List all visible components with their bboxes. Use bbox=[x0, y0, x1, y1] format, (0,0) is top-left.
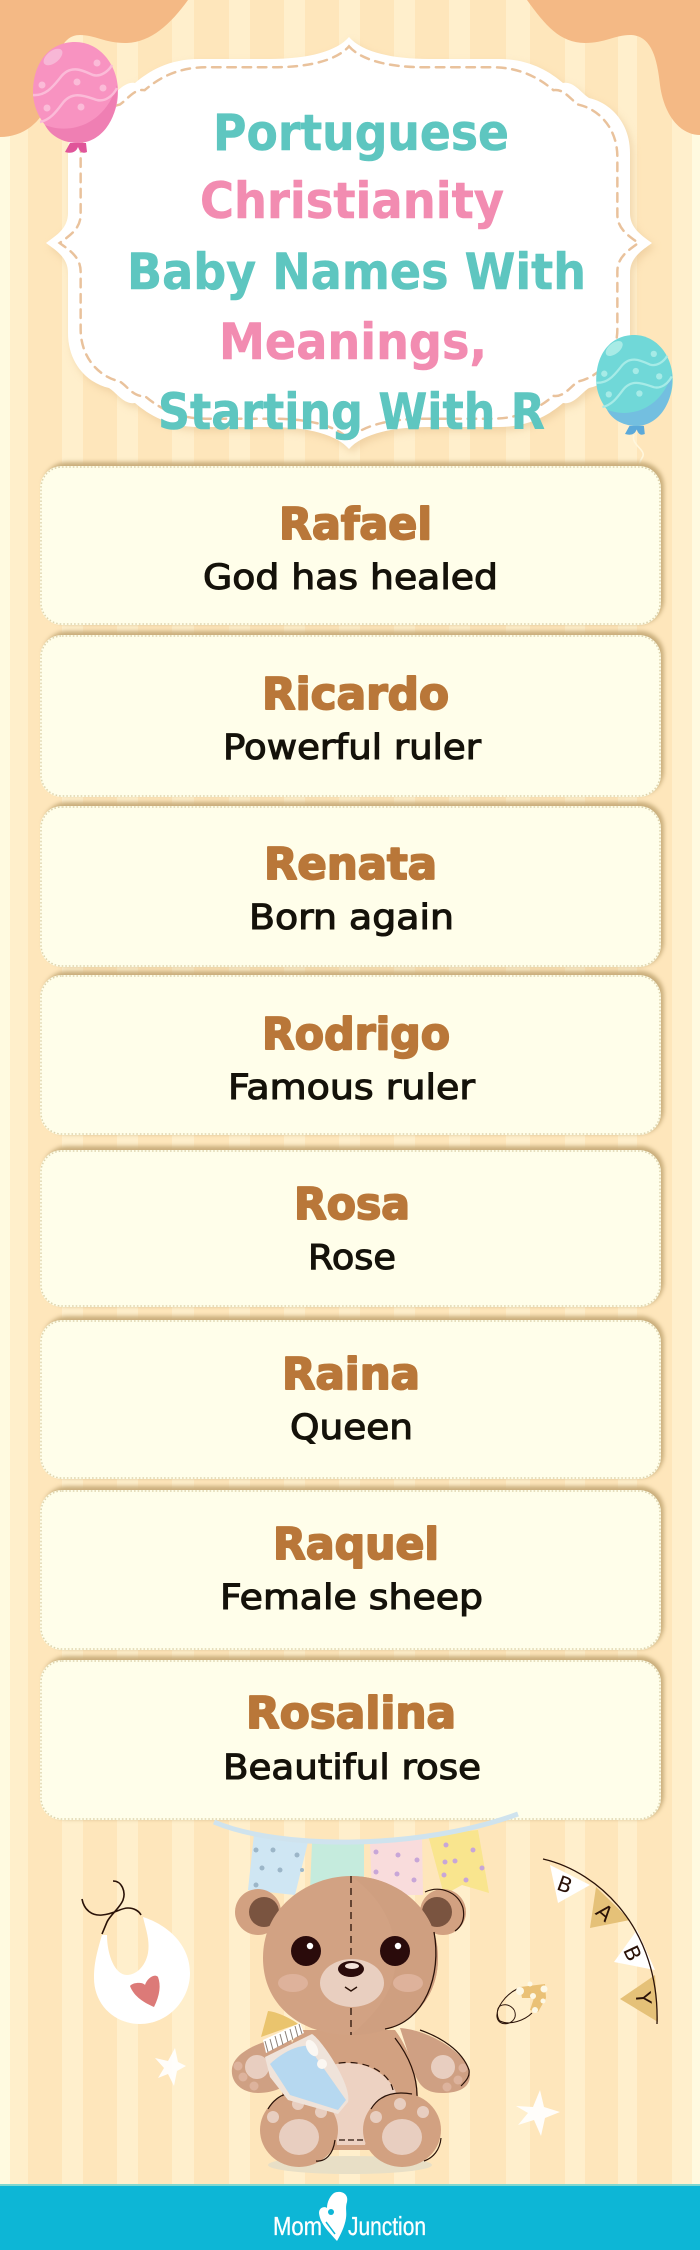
cheeks bbox=[278, 1974, 308, 1992]
left arm bbox=[232, 2035, 300, 2093]
right ear bbox=[420, 1889, 466, 1935]
body bbox=[282, 2030, 418, 2150]
meaning: Famous ruler: Famous ruler bbox=[228, 1068, 476, 1108]
flag B second: B bbox=[618, 1942, 646, 1965]
name: Rafael: Rafael bbox=[279, 499, 432, 550]
muzzle bbox=[320, 1959, 384, 2007]
name: Renata: Renata bbox=[264, 839, 437, 890]
left foot bbox=[260, 2092, 338, 2167]
icon: safety pin bbox=[497, 1982, 548, 2024]
icon: teddy bear bbox=[232, 1876, 470, 2174]
flag A bbox=[590, 1887, 630, 1928]
name: Rosa: Rosa bbox=[294, 1179, 410, 1230]
icon: star right bbox=[516, 2090, 560, 2136]
flag B second bbox=[614, 1930, 655, 1970]
BABY banner bbox=[543, 1859, 658, 2024]
footer logo bbox=[273, 2192, 426, 2241]
panel: Raquel bbox=[40, 1486, 664, 1650]
heart bbox=[130, 1976, 160, 2007]
name: Rosalina: Rosalina bbox=[246, 1688, 456, 1739]
name: Rodrigo: Rodrigo bbox=[262, 1009, 450, 1060]
milk bottle bbox=[261, 2011, 348, 2114]
panel: Renata bbox=[40, 802, 664, 967]
panel: Rosalina bbox=[40, 1656, 664, 1820]
logo icon bbox=[319, 2192, 347, 2241]
footer bar bbox=[0, 2184, 700, 2250]
bunting flags bbox=[214, 1814, 518, 1895]
icon: star left bbox=[155, 2048, 186, 2086]
footer logo: Junction bbox=[348, 2211, 426, 2241]
title bbox=[127, 104, 586, 441]
panel: Rosa bbox=[40, 1146, 664, 1307]
belly patch bbox=[327, 2062, 398, 2145]
right arm bbox=[400, 2028, 470, 2093]
panel: Raina bbox=[40, 1316, 664, 1479]
meaning: Female sheep: Female sheep bbox=[220, 1578, 483, 1618]
ground shadow bbox=[268, 2156, 432, 2174]
title: Portuguese bbox=[213, 104, 509, 162]
flag Y: Y bbox=[630, 1990, 656, 2006]
icon: teal balloon bbox=[596, 335, 673, 474]
top right curtain bbox=[527, 0, 700, 135]
title: Baby Names With bbox=[127, 243, 586, 301]
meaning: Born again: Born again bbox=[249, 898, 454, 938]
flag A: A bbox=[591, 1899, 618, 1927]
left eye bbox=[291, 1936, 321, 1966]
right foot bbox=[363, 2093, 441, 2167]
footer logo: Mom bbox=[273, 2211, 322, 2241]
mouth bbox=[345, 1987, 357, 1991]
title: Christianity bbox=[200, 172, 504, 230]
name: Ricardo: Ricardo bbox=[262, 669, 449, 720]
head bbox=[263, 1876, 438, 2035]
icon: bib bbox=[82, 1881, 190, 2024]
top left curtain bbox=[0, 0, 188, 137]
flag B: B bbox=[554, 1871, 576, 1899]
bib strings bbox=[82, 1881, 141, 1934]
panel: Rafael bbox=[40, 462, 664, 625]
meaning: Rose: Rose bbox=[308, 1238, 396, 1278]
meaning: God has healed: God has healed bbox=[203, 558, 498, 598]
name: Raquel: Raquel bbox=[273, 1519, 439, 1570]
right eye bbox=[380, 1936, 410, 1966]
nose bbox=[338, 1961, 364, 1977]
left ear bbox=[235, 1889, 281, 1935]
panel: Rodrigo bbox=[40, 971, 664, 1135]
icon: pink balloon bbox=[33, 42, 118, 153]
meaning: Beautiful rose: Beautiful rose bbox=[223, 1748, 481, 1788]
title plaque bbox=[46, 37, 655, 453]
meaning: Powerful ruler: Powerful ruler bbox=[223, 728, 482, 768]
name: Raina: Raina bbox=[282, 1349, 420, 1400]
flag Y bbox=[620, 1975, 658, 2022]
title: Meanings, bbox=[219, 313, 487, 371]
panel: Ricardo bbox=[40, 631, 664, 797]
meaning: Queen: Queen bbox=[290, 1408, 413, 1448]
flag B bbox=[550, 1865, 590, 1903]
title: Starting With R bbox=[158, 383, 545, 441]
